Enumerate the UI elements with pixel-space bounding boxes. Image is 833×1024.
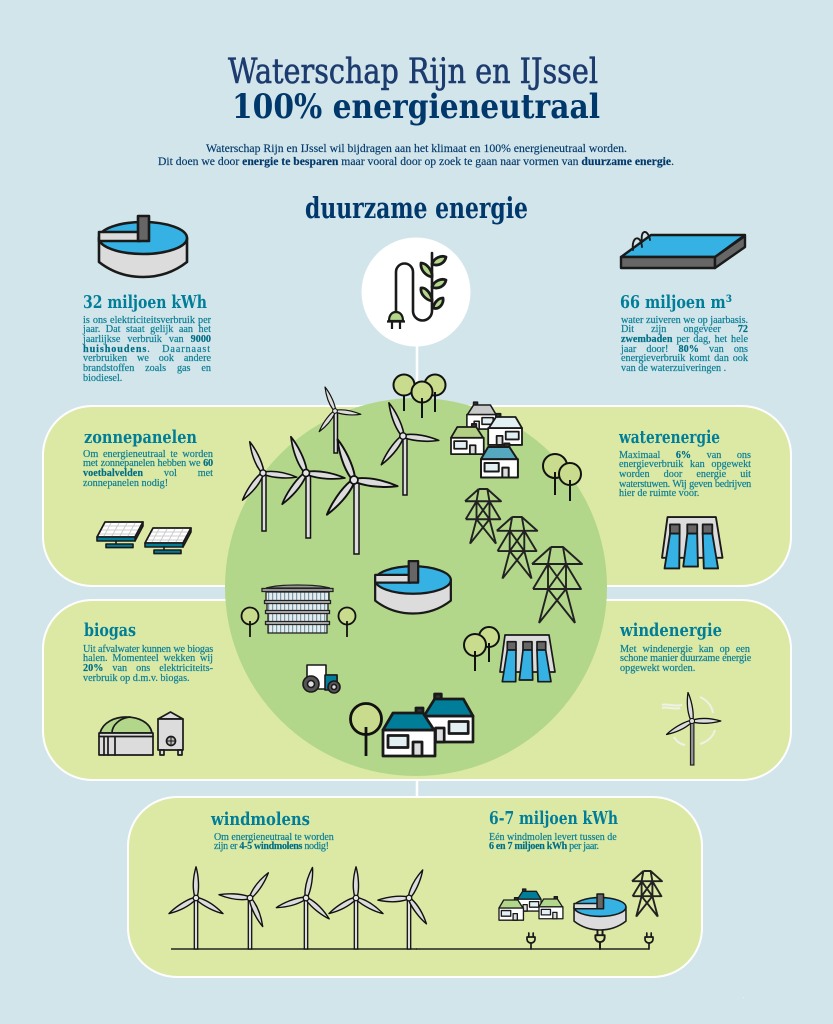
- heading: 6-7 miljoen kWh: 6-7 miljoen kWh: [489, 808, 618, 829]
- intro text: Dit doen we door energie te besparen maar vooral door op zoek te gaan naar vormen van duurzame energie.: [158, 154, 674, 168]
- central circle: [225, 398, 607, 776]
- connector lines: [416, 340, 418, 797]
- text: biogas: 20% van ons elektriciteits-: [83, 663, 213, 674]
- icon: weir: [662, 517, 722, 568]
- text: water treatment: Dit zijn ongeveer 72: [621, 324, 748, 335]
- text: electricity use: [83, 316, 211, 386]
- title: 100% energieneutraal: [232, 87, 600, 127]
- text: waterenergie: Maximaal 6% van ons: [619, 450, 751, 461]
- digester tower with trees: [242, 585, 356, 637]
- panel: waterenergie: [417, 406, 791, 586]
- text: electricity use: huishoudens. Daarnaast: [83, 344, 211, 355]
- text: biogas: Uit afvalwater kunnen we biogas: [83, 644, 213, 655]
- text: 6-7 miljoen kWh: [489, 833, 619, 855]
- text: water treatment: jaar door! 80% van ons: [621, 344, 748, 355]
- text: electricity use: brandstoffen zoals gas en: [83, 363, 211, 374]
- text: windenergie: Met windenergie kan op een: [620, 644, 750, 655]
- text: zonnepanelen: met zonnepanelen hebben we 60: [83, 458, 213, 469]
- text: water treatment: zwembaden per dag, het hele: [621, 334, 748, 345]
- text: water treatment: [621, 316, 748, 376]
- heading: duurzame energie: duurzame energie: [305, 191, 528, 225]
- wind turbines: [221, 378, 441, 554]
- text: zonnepanelen: voetbalvelden vol met: [83, 468, 213, 479]
- title: Waterschap Rijn en IJssel: [228, 52, 598, 92]
- heading: 32 miljoen kWh: 32 miljoen kWh: [83, 292, 207, 313]
- text: water treatment: van de waterzuiveringen .: [621, 363, 726, 374]
- intro text: Waterschap Rijn en IJssel wil bijdragen aan het klimaat en 100% energieneutraal worden.: [206, 141, 627, 155]
- heading: windmolens: windmolens: [210, 809, 310, 830]
- heading: biogas: biogas: [84, 620, 136, 641]
- trees at top: [394, 374, 446, 418]
- houses at bottom: [383, 694, 473, 756]
- text: biogas: verbruik op d.m.v. biogas.: [83, 673, 190, 684]
- text: waterenergie: waterstuwen. Wij geven bedrijven: [619, 479, 751, 490]
- icon: solar panels: [97, 522, 191, 554]
- text: electricity use: biodiesel.: [83, 373, 122, 384]
- icon: wind turbine with wind: [662, 692, 721, 765]
- text: electricity use: jaar. Dat staat gelijk aan het: [83, 324, 211, 335]
- text: electricity use: is ons elektriciteitsverbruik per: [83, 315, 211, 326]
- icon: biogas installation: [99, 712, 183, 755]
- scene inside the circle: [221, 374, 582, 756]
- text: windmolens: zijn er 4-5 windmolens nodig!: [214, 841, 329, 852]
- trees and weir: [464, 627, 555, 682]
- icon: swimming pool: [621, 232, 745, 268]
- icon: plug and plant circle: [362, 238, 470, 346]
- panel: 6-7 miljoen kWh: [416, 797, 702, 977]
- text: windenergie: [620, 645, 750, 675]
- trees on the right: [543, 454, 581, 501]
- heading: waterenergie: waterenergie: [618, 427, 720, 448]
- tractor: [303, 665, 340, 693]
- block: 32 miljoen kWh: [83, 216, 211, 386]
- row of wind turbines: [168, 856, 448, 949]
- text: zonnepanelen: Om energieneutraal te worden: [83, 449, 213, 460]
- text: water treatment: water zuiveren we op jaarbasis.: [621, 315, 748, 326]
- icon group: consumers on the grid: [416, 871, 662, 949]
- text: zonnepanelen: zonnepanelen nodig!: [83, 478, 168, 489]
- text: windenergie: opgewekt worden.: [620, 663, 695, 674]
- panel: windenergie: [417, 600, 791, 780]
- text: 6-7 miljoen kWh: Eén windmolen levert tussen de: [489, 832, 617, 843]
- panel: zonnepanelen: [43, 406, 417, 586]
- title: [228, 52, 600, 127]
- text: windmolens: Om energieneutraal te worden: [214, 832, 334, 843]
- text: waterenergie: energieverbruik kan opgewekt: [619, 459, 751, 470]
- text: 6-7 miljoen kWh: 6 en 7 miljoen kWh per jaar.: [489, 841, 599, 852]
- text: waterenergie: hier de ruimte voor.: [619, 488, 699, 499]
- text: biogas: halen. Momenteel wekken wij: [83, 653, 213, 664]
- heading: zonnepanelen: zonnepanelen: [84, 427, 197, 448]
- text: electricity use: verbruiken we ook andere: [83, 353, 211, 364]
- text: windmolens: [214, 833, 339, 855]
- text: waterenergie: worden door energie uit: [619, 469, 751, 480]
- panel: biogas: [43, 600, 417, 780]
- text: zonnepanelen: [83, 450, 213, 490]
- clarifier in the centre: [375, 561, 451, 614]
- panel: windmolens: [128, 797, 448, 977]
- text: electricity use: jaarlijkse verbruik van 9000: [83, 334, 211, 345]
- text: waterenergie: [619, 451, 751, 501]
- text: water treatment: energieverbruik komt dan ook: [621, 353, 748, 364]
- icon: clarifier: [99, 216, 187, 277]
- electricity pylons: [465, 489, 582, 623]
- intro text: [158, 141, 674, 168]
- block: 66 miljoen m3: [620, 232, 748, 376]
- heading: windenergie: windenergie: [619, 620, 722, 641]
- text: windenergie: schone manier duurzame energie: [620, 653, 751, 664]
- text: biogas: [83, 645, 213, 685]
- heading: 66 miljoen m3: 66 miljoen m³: [620, 292, 732, 313]
- houses at top right: [451, 402, 522, 478]
- tree by the houses: [350, 704, 382, 756]
